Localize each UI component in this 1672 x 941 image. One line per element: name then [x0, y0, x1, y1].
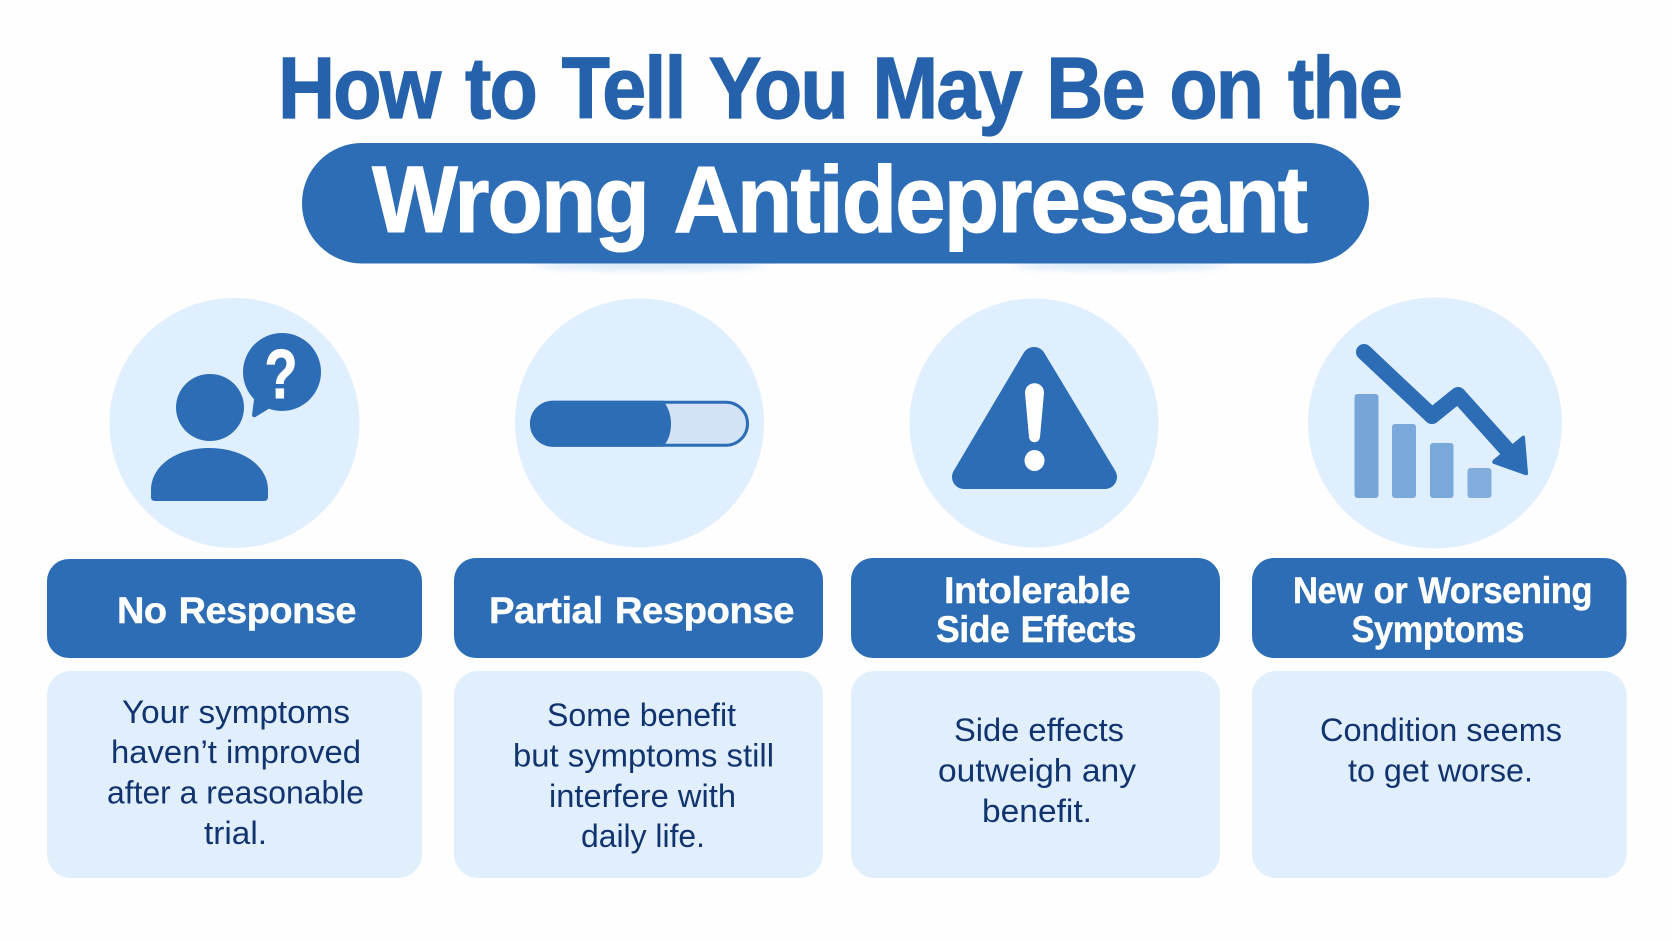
description: New or Worsening Symptoms	[1252, 671, 1626, 878]
description: Partial Response: daily life.	[581, 818, 705, 854]
description: Intolerable Side Effects	[851, 671, 1220, 878]
description: Partial Response	[454, 671, 823, 878]
column: Partial Response	[454, 298, 823, 878]
header: New or Worsening Symptoms: New or Worsening	[1293, 569, 1592, 611]
column: Intolerable Side Effects	[851, 298, 1220, 878]
description: New or Worsening Symptoms: to get worse.	[1348, 752, 1533, 788]
description: Intolerable Side Effects: outweigh any	[938, 752, 1136, 788]
icon: falling bar chart with down arrow	[1308, 298, 1562, 548]
icon: person with question bubble: ?	[264, 335, 298, 413]
description: New or Worsening Symptoms: Condition seems	[1320, 712, 1562, 748]
description: Intolerable Side Effects: benefit.	[982, 793, 1092, 829]
description: No Response: haven’t improved	[111, 734, 361, 770]
icon: partially filled progress bar	[515, 298, 764, 548]
header: Intolerable Side Effects: Intolerable	[944, 569, 1130, 611]
header: Intolerable Side Effects: Side Effects	[936, 608, 1136, 650]
description: Partial Response: but symptoms still	[513, 738, 774, 774]
description: No Response: Your symptoms	[122, 694, 350, 730]
header: New or Worsening Symptoms: Symptoms	[1352, 608, 1524, 650]
header: No Response: No Response	[117, 589, 356, 631]
header: No Response	[47, 559, 422, 658]
description: No Response	[47, 671, 422, 878]
description: No Response: after a reasonable	[107, 774, 364, 810]
header: Intolerable Side Effects	[851, 558, 1220, 658]
header: Partial Response: Partial Response	[489, 589, 794, 631]
icon: warning triangle	[910, 298, 1158, 548]
description: Partial Response: Some benefit	[547, 697, 736, 733]
title highlight pill: Wrong Antidepressant	[372, 147, 1307, 253]
description: Partial Response: interfere with	[549, 778, 736, 814]
description: Intolerable Side Effects: Side effects	[954, 712, 1124, 748]
icon: person with question bubble	[110, 298, 360, 548]
column: New or Worsening Symptoms	[1252, 298, 1626, 878]
header: Partial Response	[454, 558, 823, 658]
column: No Response	[47, 298, 422, 878]
title line: How to Tell You May Be on the	[278, 40, 1401, 137]
header: New or Worsening Symptoms	[1252, 558, 1626, 658]
description: No Response: trial.	[204, 815, 267, 851]
